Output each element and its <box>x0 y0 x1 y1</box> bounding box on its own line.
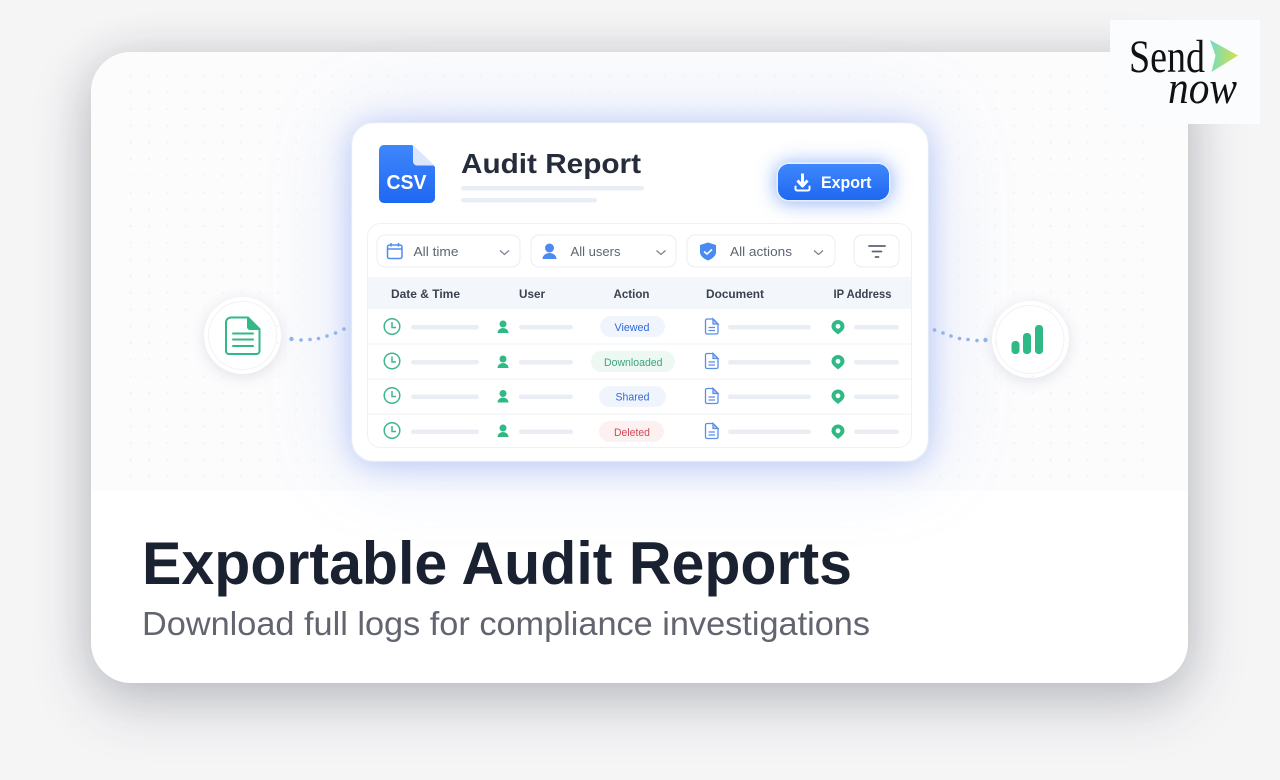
icon: bar chart badge <box>996 306 1064 374</box>
dot grid background <box>125 70 1155 482</box>
logo: Send now <box>1110 20 1260 124</box>
filter: All users: All users <box>570 244 621 259</box>
filter: All time: All time <box>414 244 458 259</box>
filter: All users <box>531 235 676 267</box>
table row: Viewed: Viewed <box>614 322 650 334</box>
filter: All actions: All actions <box>730 244 793 259</box>
table row: Deleted <box>384 421 899 442</box>
subtitle placeholder lines <box>461 186 644 202</box>
table header: IP Address <box>834 287 892 301</box>
row dividers <box>368 344 911 414</box>
panel: audit report window <box>352 122 928 462</box>
table row: Downloaded: Downloaded <box>604 357 662 369</box>
table header: Action <box>614 287 650 301</box>
chart badge disc <box>992 301 1068 378</box>
table container <box>368 224 912 448</box>
icon: CSV file <box>379 145 435 203</box>
button: Export: Export <box>821 174 872 192</box>
document badge disc <box>204 297 281 374</box>
filter: All time <box>377 235 520 267</box>
table row: Deleted: Deleted <box>614 427 650 439</box>
panel glow <box>351 122 929 462</box>
icon: CSV file: CSV <box>386 172 427 194</box>
subtitle: Download full logs for compliance investigations <box>142 605 870 642</box>
filter: funnel button <box>854 235 899 267</box>
heading: Audit Report: Audit Report <box>461 148 641 179</box>
table row: Shared <box>384 386 899 407</box>
logo: Send now: Send <box>1129 31 1205 83</box>
title: Exportable Audit Reports <box>142 530 852 597</box>
filter: All actions <box>687 235 835 267</box>
table row: Shared: Shared <box>616 392 650 404</box>
table header <box>368 277 911 309</box>
table row: Viewed <box>384 316 899 337</box>
table header: User <box>519 287 545 301</box>
table row: Downloaded <box>384 351 899 372</box>
main card <box>91 52 1188 683</box>
connector: left dotted line <box>289 327 346 342</box>
icon: document badge <box>208 302 276 370</box>
button: Export <box>778 164 889 200</box>
logo: Send now: now <box>1168 62 1237 113</box>
connector: right dotted line <box>933 328 988 342</box>
table header: Document <box>706 287 764 301</box>
button glow <box>778 164 889 200</box>
table header: Date & Time <box>391 287 460 301</box>
